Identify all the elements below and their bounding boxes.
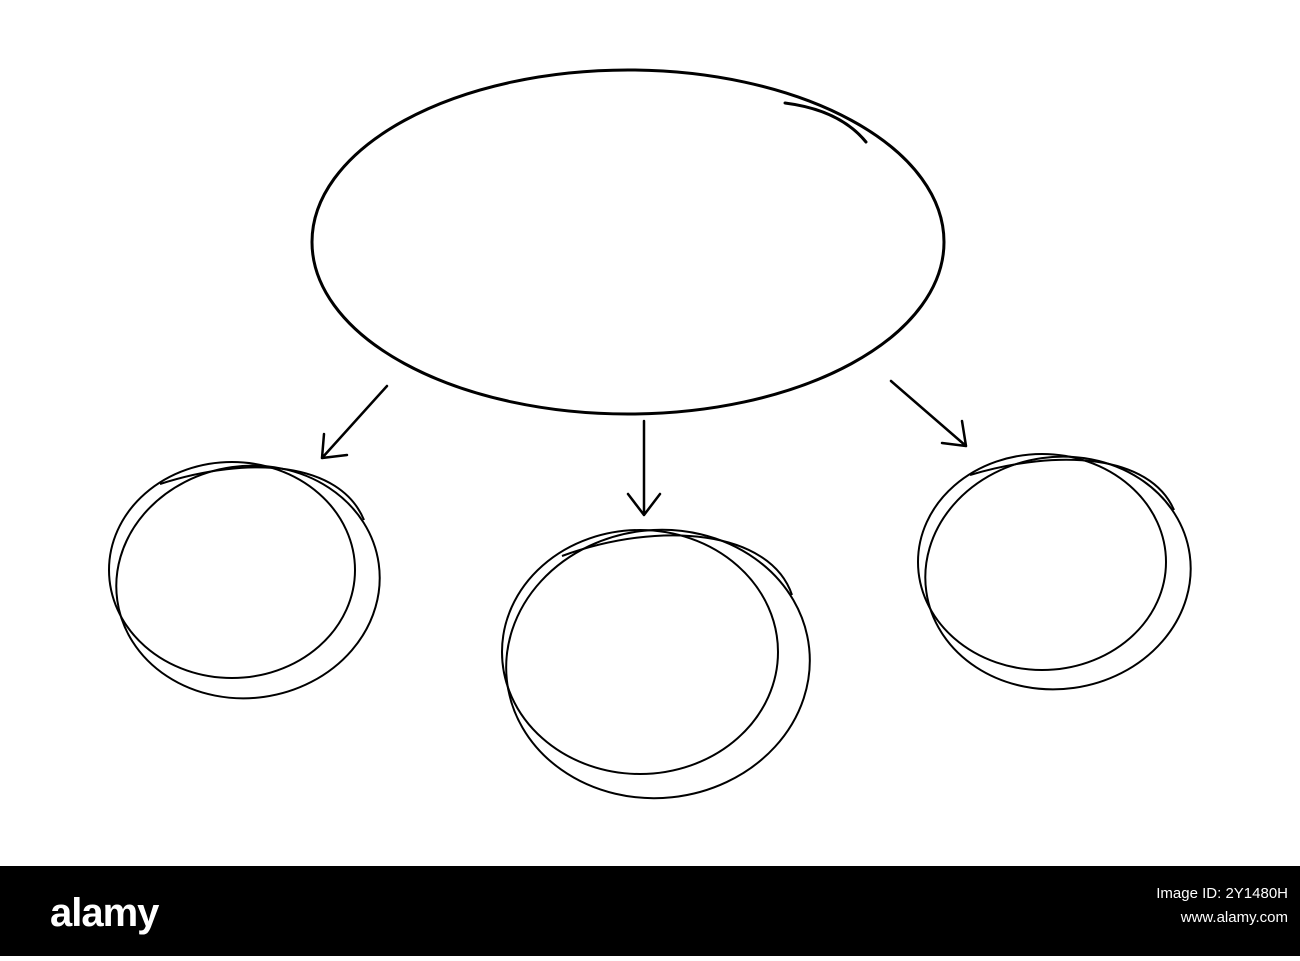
arrow: left: [322, 386, 387, 458]
main oval: [312, 70, 944, 414]
right circle: [910, 440, 1206, 706]
footer bar: [0, 866, 1300, 956]
arrow: middle: [628, 421, 660, 515]
logo text: alamy: [50, 891, 160, 935]
url: www.alamy.com: [1180, 909, 1288, 926]
image id: Image ID: 2Y1480H: [1156, 885, 1288, 902]
left circle: [101, 449, 395, 715]
arrow: right: [891, 381, 966, 446]
middle circle: [493, 515, 823, 813]
